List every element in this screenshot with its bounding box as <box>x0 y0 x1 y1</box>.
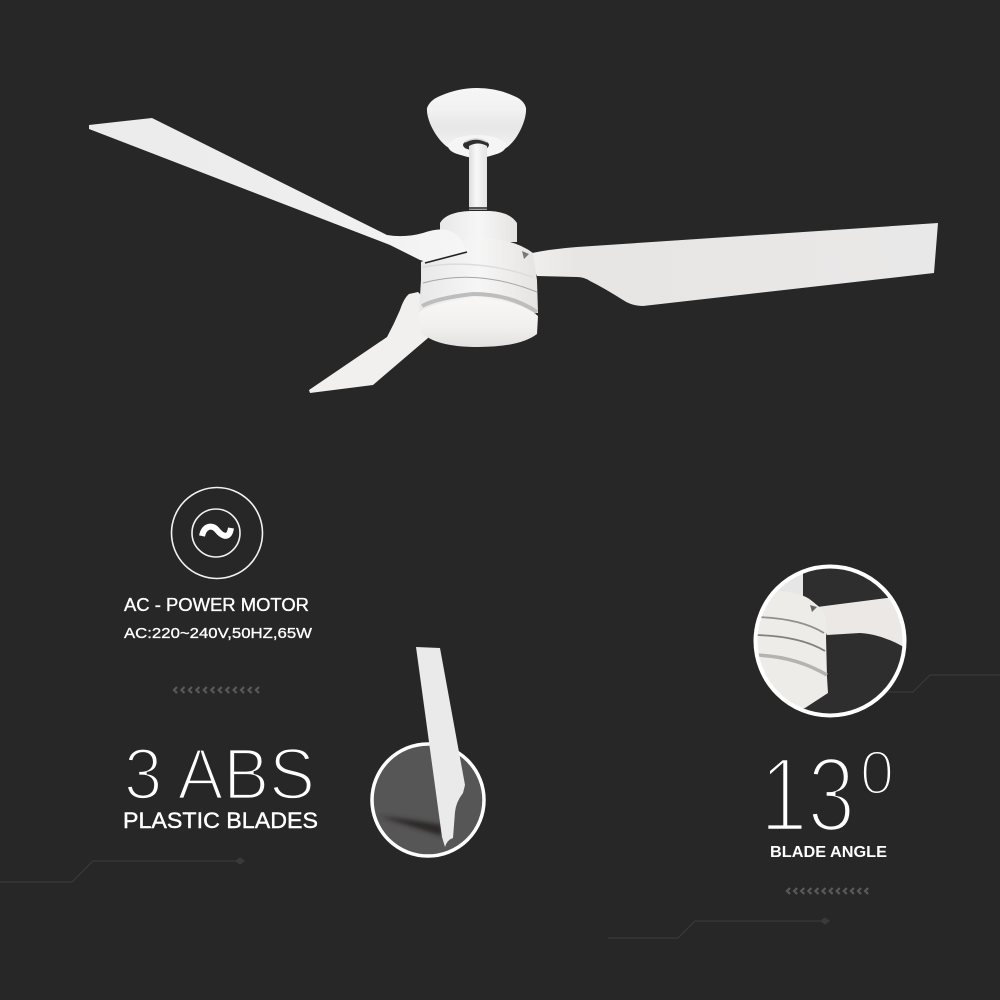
subheading: plastic blades: PLASTIC BLADES <box>123 808 318 833</box>
motor housing <box>419 211 538 313</box>
chevron divider <box>787 888 868 894</box>
fan blade: right <box>527 223 938 306</box>
value: 13 degrees: 13 <box>760 736 855 854</box>
light cover <box>419 298 538 347</box>
downrod <box>469 144 487 210</box>
ceiling fan product image <box>89 88 938 393</box>
label: blade angle: BLADE ANGLE <box>770 844 887 861</box>
fan blade: left <box>89 118 468 262</box>
spec line: voltage and wattage: AC:220~240V,50HZ,65W <box>124 625 313 642</box>
icon: AC sine wave in circles <box>172 488 262 578</box>
value: 13 degrees: 0 <box>860 739 894 808</box>
ceiling canopy <box>427 88 526 158</box>
decorative circuit line: right <box>888 675 1000 692</box>
heading: AC power motor: AC - POWER MOTOR <box>124 595 309 615</box>
detail: blade angle in circle <box>754 564 906 718</box>
fan blade: lower left <box>309 292 428 393</box>
chevron divider <box>174 687 259 693</box>
detail: blade in circle <box>372 647 484 856</box>
ABS blades feature <box>123 647 484 856</box>
AC motor feature <box>124 488 313 693</box>
decorative circuit line: bottom right <box>608 918 829 938</box>
blade slot shadow <box>425 252 467 263</box>
blade angle feature <box>745 560 908 894</box>
heading: 3 ABS: 3 ABS <box>124 735 315 815</box>
decorative circuit line: left <box>0 858 244 882</box>
